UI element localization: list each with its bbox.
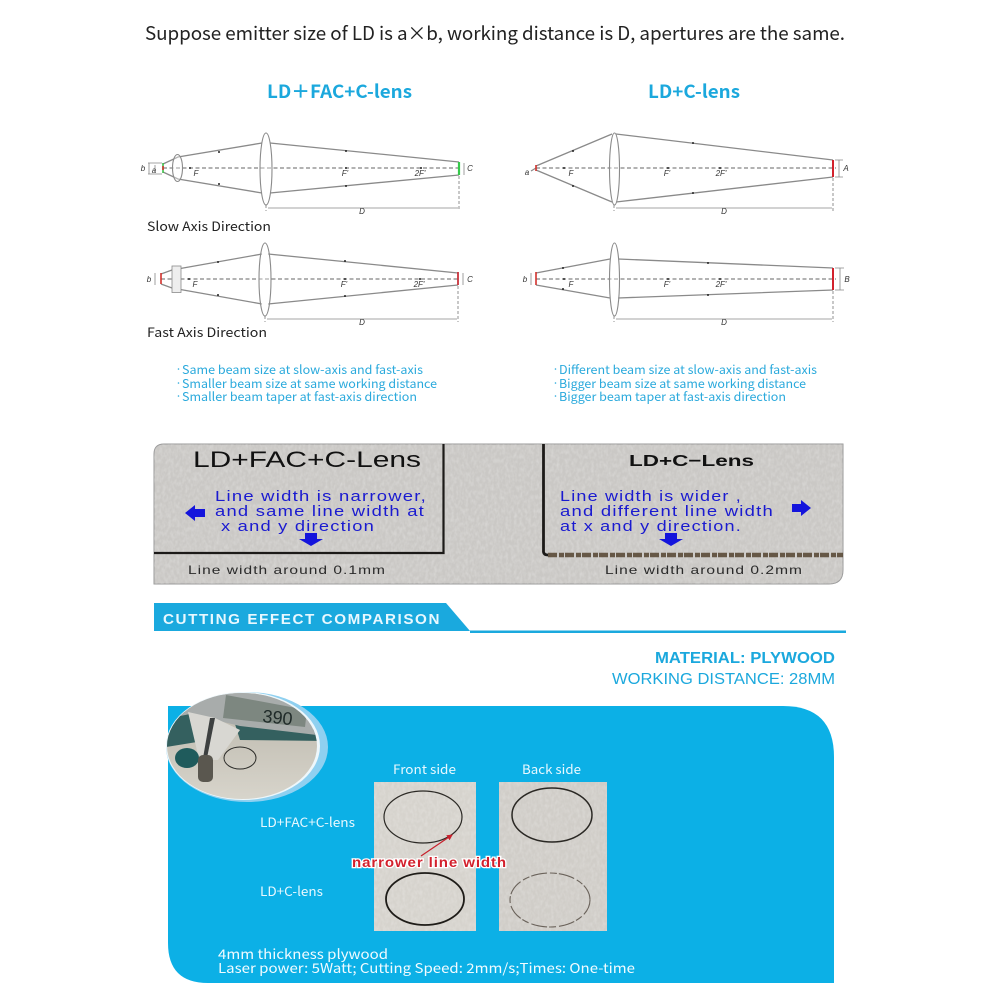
diagram: FAC slow axis: F' (342, 169, 349, 178)
annotation: left: and same line width at (215, 503, 425, 520)
text block: no FAC drawbacks (555, 361, 817, 405)
diagram: FAC fast axis (147, 243, 473, 327)
diagram: no FAC fast axis: 2F' (715, 280, 727, 289)
title: Suppose emitter size of LD is a×b, working distance is D, apertures are the same. (145, 19, 845, 46)
photo heading: left: LD+FAC+C-Lens (193, 447, 421, 472)
diagram: no FAC fast axis: F' (664, 280, 671, 289)
working distance: WORKING DISTANCE: 28MM (612, 671, 835, 688)
text block: no FAC drawbacks: Bigger beam taper at fast-axis direction (559, 388, 786, 405)
diagram: no FAC slow axis: F (569, 169, 575, 178)
test parameters: Laser power: 5Watt; Cutting Speed: 2mm/s;Times: One-time (218, 957, 635, 977)
diagram: no FAC slow axis: A (842, 164, 849, 173)
icon: arrow down right (659, 533, 683, 546)
photo: caliper measuring: 390 (262, 706, 294, 729)
icon: arrow down left (299, 533, 323, 546)
text block: FAC benefits (178, 361, 437, 405)
material heading: MATERIAL: PLYWOOD (655, 650, 835, 667)
caption: right line width: Line width around 0.2mm (605, 563, 803, 577)
diagram: no FAC fast axis (523, 243, 850, 327)
label: LD+FAC+C-lens row: LD+FAC+C-lens (260, 812, 355, 831)
annotation: left: x and y direction (221, 518, 375, 535)
heading: LD+C-lens: LD+C-lens (648, 78, 740, 104)
diagram: FAC fast axis: F (193, 280, 199, 289)
callout: narrower line width: narrower line width (352, 855, 507, 870)
diagram: FAC fast axis: b (147, 275, 152, 284)
diagram: no FAC fast axis: B (844, 275, 850, 284)
diagram: no FAC slow axis: 2F' (715, 169, 727, 178)
diagram: FAC slow axis: 2F' (414, 169, 426, 178)
diagram: FAC slow axis: C (467, 164, 473, 173)
diagram: no FAC slow axis: a (525, 168, 530, 177)
photo: back side samples (499, 782, 607, 931)
diagram: FAC slow axis: b (141, 164, 146, 173)
icon: arrow left (185, 505, 205, 521)
photo heading: right: LD+C−Lens (629, 453, 754, 470)
diagram: FAC fast axis: F' (341, 280, 348, 289)
diagram: no FAC slow axis: F' (664, 169, 671, 178)
label: slow axis direction: Slow Axis Direction (147, 216, 271, 235)
diagram: FAC fast axis: D (359, 318, 365, 327)
text block: FAC benefits: Smaller beam size at same working distance (182, 375, 437, 392)
heading: LD+FAC+C-lens: LD＋FAC+C-lens (267, 78, 412, 104)
diagram: no FAC fast axis: b (523, 275, 528, 284)
label: fast axis direction: Fast Axis Direction (147, 322, 267, 341)
annotation: right (560, 488, 774, 535)
diagram: FAC fast axis: C (467, 275, 473, 284)
panel: cutting test (160, 690, 834, 983)
diagram: FAC fast axis: 2F' (413, 280, 425, 289)
section header: cutting effect comparison (154, 603, 846, 633)
annotation: right: and different line width (560, 503, 774, 520)
annotation: right: Line width is wider , (560, 488, 742, 505)
text block: FAC benefits: Same beam size at slow-axis and fast-axis (182, 361, 423, 378)
diagram: FAC slow axis (141, 133, 473, 216)
text block: no FAC drawbacks: Different beam size at slow-axis and fast-axis (559, 361, 817, 378)
section header: cutting effect comparison: CUTTING EFFECT COMPARISON (163, 612, 441, 628)
annotation: left: Line width is narrower, (215, 488, 427, 505)
diagram: FAC slow axis: F (194, 169, 200, 178)
diagram: no FAC slow axis: D (721, 207, 727, 216)
test parameters: 4mm thickness plywood (218, 943, 388, 963)
callout: narrower line width (352, 835, 507, 870)
label: LD+C-lens row: LD+C-lens (260, 881, 323, 900)
diagram: no FAC fast axis: F (569, 280, 575, 289)
test parameters (218, 943, 635, 977)
label: back side: Back side (522, 759, 581, 778)
text block: no FAC drawbacks: Bigger beam size at same working distance (559, 375, 806, 392)
photo: front side samples (374, 782, 476, 931)
annotation: left (215, 488, 427, 535)
panel: line width photo comparison (154, 444, 844, 584)
diagram: no FAC fast axis: D (721, 318, 727, 327)
label: front side: Front side (393, 759, 456, 778)
diagram: no FAC slow axis (525, 133, 849, 216)
annotation: right: at x and y direction. (560, 518, 742, 535)
photo: caliper measuring (160, 690, 328, 805)
text block: FAC benefits: Smaller beam taper at fast-axis direction (182, 388, 417, 405)
diagram: FAC slow axis: D (359, 207, 365, 216)
icon: arrow right (792, 500, 811, 516)
caption: left line width: Line width around 0.1mm (188, 563, 386, 577)
diagram: FAC slow axis: a (152, 166, 157, 175)
